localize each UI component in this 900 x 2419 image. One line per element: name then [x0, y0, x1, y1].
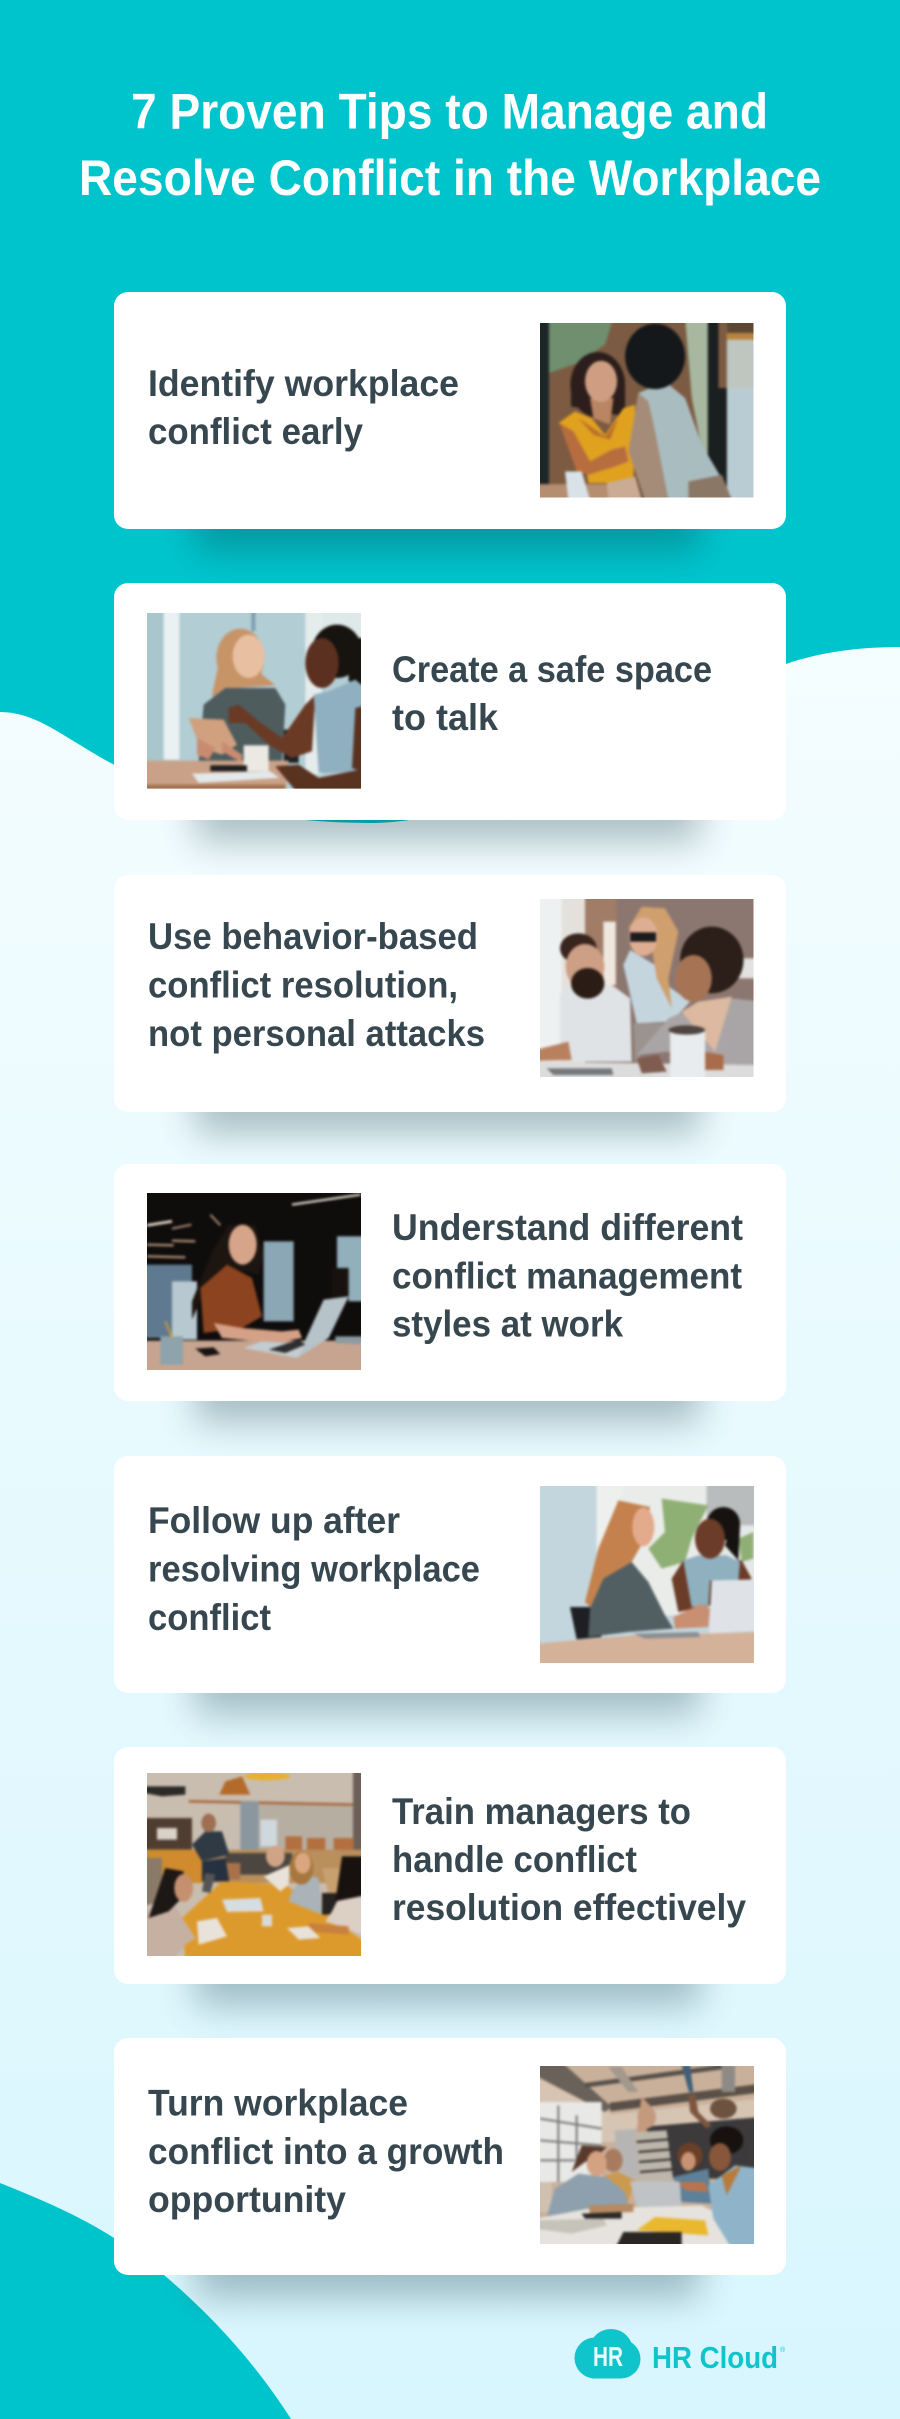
tip 4 text: Understand different [392, 1207, 743, 1248]
tip 7 text [148, 2082, 504, 2220]
tip 2 text: Create a safe space [392, 649, 712, 690]
tip 5 text [148, 1500, 480, 1638]
tip 7 text: opportunity [148, 2179, 346, 2220]
panel: tip 7 [114, 2038, 786, 2298]
panel: tip 5 [114, 1456, 786, 1715]
tip 1 text: Identify workplace [148, 363, 459, 404]
pale wave background [0, 647, 900, 2419]
bottom-left teal corner shape [0, 2183, 291, 2419]
tip 6 text: resolution effectively [392, 1887, 746, 1928]
photo: two women shaking hands [540, 323, 754, 498]
cloud initials: HR [593, 2341, 623, 2372]
tip 3 text [148, 916, 485, 1054]
tip 1 text: conflict early [148, 411, 363, 452]
photo: team celebrating at table [540, 2066, 754, 2244]
tip 5 text: resolving workplace [148, 1548, 480, 1590]
tip 3 text: conflict resolution, [148, 964, 458, 1006]
tip 3 text: not personal attacks [148, 1013, 485, 1054]
wordmark: HR Cloud [652, 2340, 778, 2375]
icon: cloud [574, 2329, 640, 2378]
panel: tip 3 [114, 875, 786, 1134]
tip 5 text: conflict [148, 1597, 271, 1638]
tip 6 text: handle conflict [392, 1839, 637, 1880]
registered mark: ® [780, 2346, 786, 2354]
photo: two women with a tablet [147, 613, 361, 789]
photo: two women at a table with laptop [540, 1486, 754, 1663]
tip 4 text [392, 1207, 743, 1344]
photo: woman at laptop in dark office [147, 1193, 361, 1370]
tip 6 text: Train managers to [392, 1791, 691, 1832]
tip 6 text [392, 1791, 746, 1928]
tip 2 text [392, 649, 712, 738]
panel: tip 4 [114, 1164, 786, 1423]
tip 4 text: conflict management [392, 1256, 742, 1296]
panel: tip 6 [114, 1747, 786, 2006]
tip 7 text: conflict into a growth [148, 2131, 504, 2172]
tip 1 text [148, 363, 459, 452]
tip 2 text: to talk [392, 697, 498, 738]
panel: tip 2 [114, 583, 786, 842]
title: 7 Proven Tips to Manage and [131, 84, 768, 140]
panel: tip 1 [114, 292, 786, 551]
photo: three colleagues at a desk [540, 899, 754, 1077]
title: Resolve Conflict in the Workplace [79, 150, 821, 206]
tip 5 text: Follow up after [148, 1500, 400, 1541]
title [79, 84, 821, 206]
tip 4 text: styles at work [392, 1304, 623, 1344]
tip 3 text: Use behavior-based [148, 916, 478, 957]
tip 7 text: Turn workplace [148, 2082, 408, 2124]
logo: HR Cloud [574, 2329, 786, 2378]
photo: team meeting at orange table [147, 1773, 361, 1956]
